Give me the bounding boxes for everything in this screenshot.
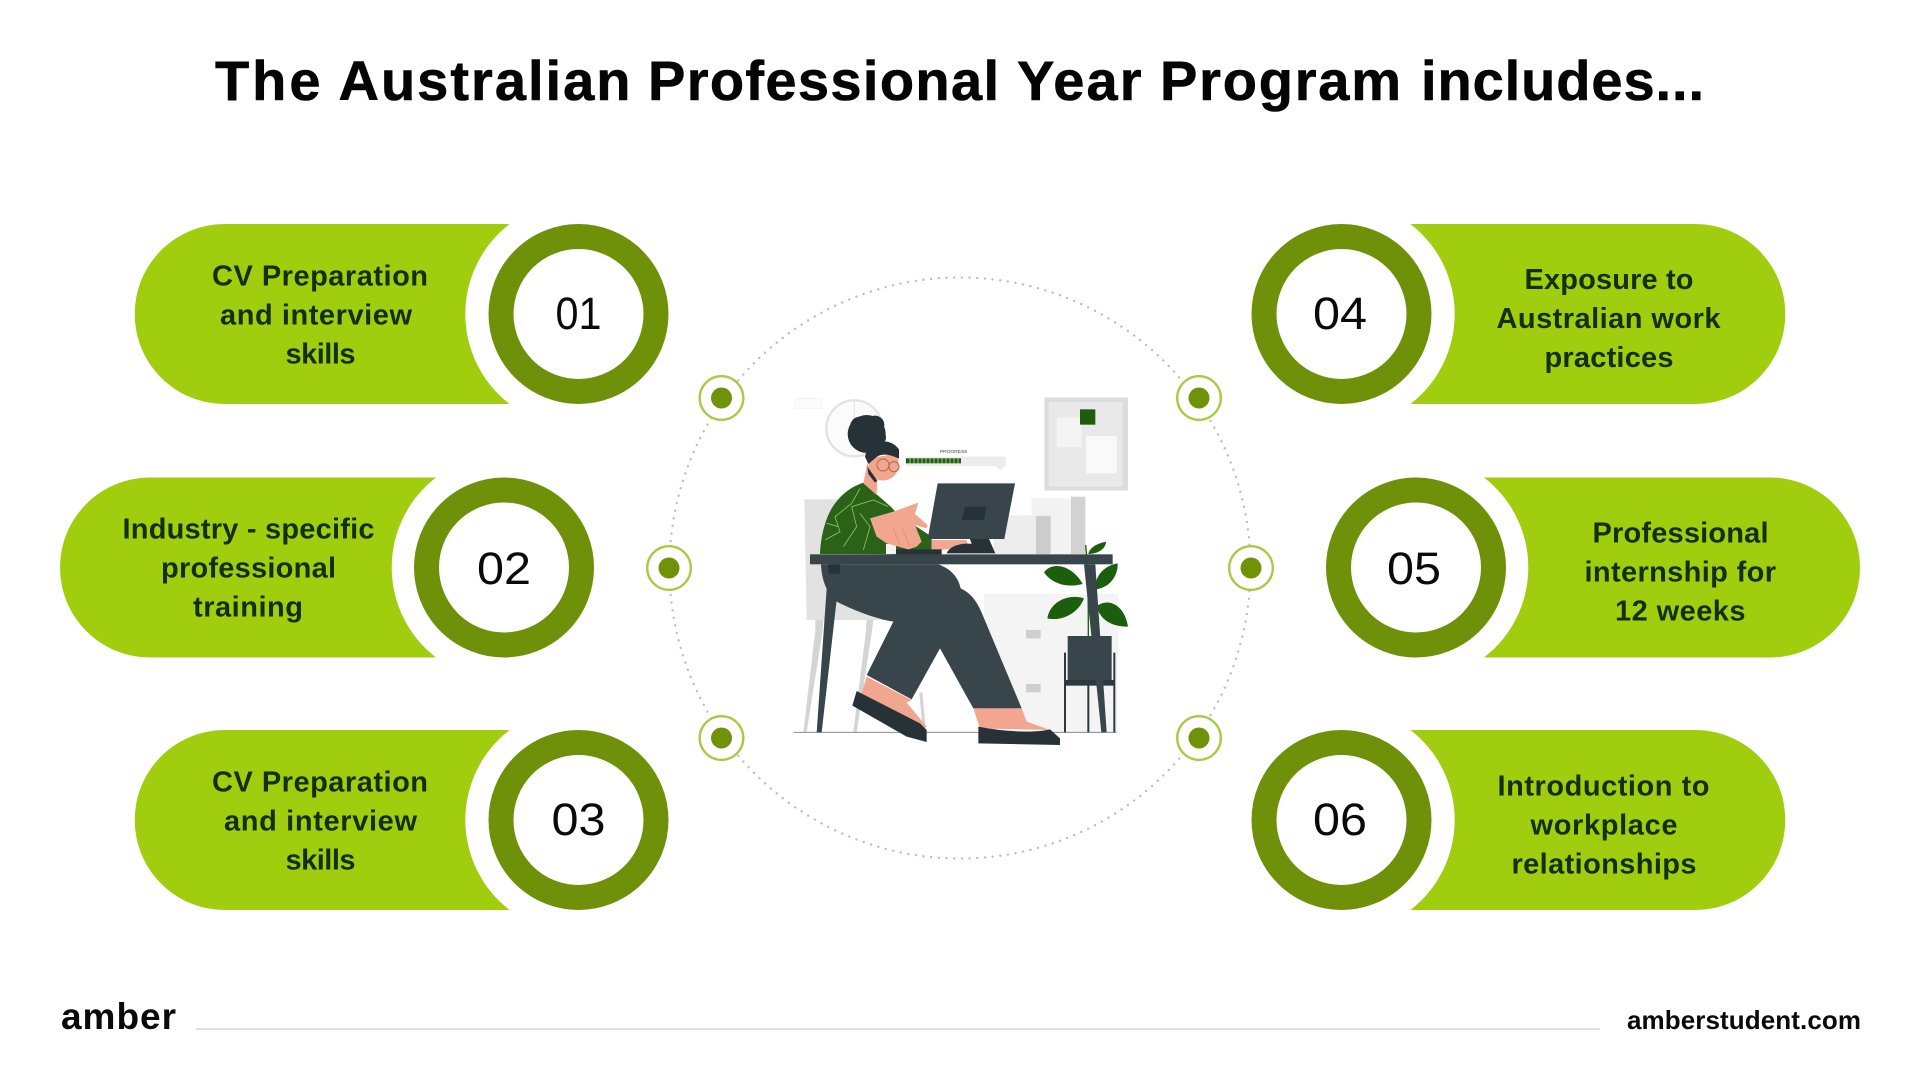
panel: item 04 [1264, 224, 1785, 404]
panel: item 03: 03 [552, 794, 606, 845]
panel: item 02: 02 [477, 543, 531, 594]
panel: item 06: Introduction to [1498, 770, 1710, 802]
chair [803, 499, 926, 732]
panel: item 04: Exposure to [1524, 264, 1694, 296]
panel: item 01: CV Preparation [212, 260, 428, 292]
floor line [793, 731, 1117, 734]
panel: item 02: training [193, 592, 303, 624]
head and hair [848, 415, 899, 495]
panel: item 05 [1338, 478, 1860, 658]
paper stacks [993, 497, 1085, 554]
desk [817, 564, 1107, 732]
footer divider [196, 1028, 1600, 1030]
panel: item 03: CV Preparation [212, 766, 428, 798]
orbit nodes [647, 376, 1273, 760]
panel: item 06: workplace [1530, 810, 1678, 842]
panel: item 04: practices [1544, 342, 1674, 374]
panel: item 05: Professional [1592, 518, 1768, 550]
pin board [1044, 397, 1128, 491]
filing cabinet [984, 594, 1118, 732]
panel: item 01: and interview [220, 300, 412, 332]
title: The [215, 49, 320, 112]
panel: item 01: 01 [556, 288, 602, 339]
panel: item 02: Industry - specific [122, 514, 374, 546]
panel: item 04: 04 [1313, 288, 1367, 339]
footer logo: amber: amber [61, 996, 176, 1037]
legs and shoes [852, 677, 1060, 745]
title: Program [1160, 49, 1401, 112]
illustration: woman working at desk [793, 397, 1128, 745]
shirt [820, 483, 932, 554]
title: Year [1017, 49, 1142, 112]
progress bar [905, 449, 1006, 471]
panel: item 01: skills [286, 338, 356, 370]
panel: item 06 [1264, 730, 1785, 910]
panel: item 03: and interview [224, 806, 417, 838]
panel: item 05: 05 [1387, 543, 1441, 594]
monitor [928, 483, 1015, 553]
panel: item 05: 12 weeks [1615, 596, 1746, 628]
panel: item 02: professional [161, 552, 336, 584]
progress bar: PROGRESS [940, 449, 968, 455]
desk top [810, 554, 1113, 564]
plant leaves [1044, 542, 1128, 637]
panel: item 06: 06 [1313, 794, 1367, 845]
title: includes... [1421, 49, 1704, 112]
plant pot on stand [1065, 636, 1114, 732]
panel: item 02 [60, 478, 582, 658]
panel: item 05: internship for [1584, 556, 1776, 588]
panel: item 04: Australian work [1496, 303, 1721, 335]
trousers [821, 564, 1022, 708]
footer url: amberstudent.com [1627, 1005, 1861, 1035]
dotted orbit circle [670, 278, 1250, 858]
panel: item 03: skills [286, 844, 356, 876]
icon: wall clock [795, 398, 882, 456]
title: Professional [648, 49, 999, 112]
panel: item 06: relationships [1512, 848, 1696, 880]
panel: item 01 [135, 224, 656, 404]
arms and keyboard [870, 503, 975, 555]
title: Australian [338, 49, 630, 112]
panel: item 03 [135, 730, 656, 910]
